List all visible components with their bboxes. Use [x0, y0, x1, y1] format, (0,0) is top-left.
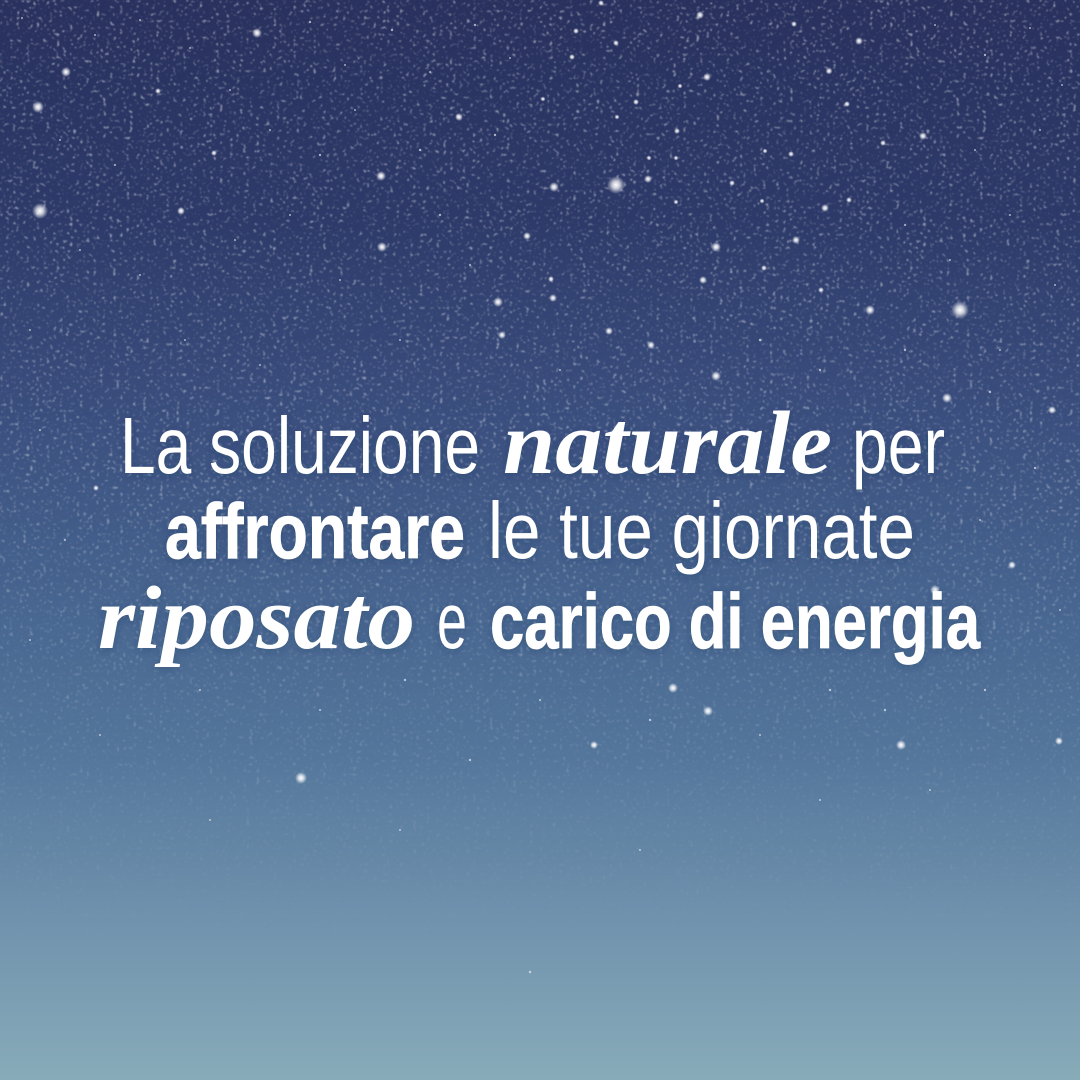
line 3: e [437, 576, 467, 665]
line 2: le tue giornate [488, 486, 915, 575]
line 1 [120, 394, 945, 493]
bright stars [32, 0, 1063, 784]
line 3: riposato [98, 569, 415, 668]
star dust texture [0, 0, 1080, 862]
line 1: La soluzione [120, 401, 480, 490]
line 3 [98, 569, 980, 668]
line 2: affrontare [165, 487, 465, 575]
slogan text [98, 394, 980, 668]
line 2 [165, 486, 915, 575]
line 1: naturale [503, 394, 832, 493]
line 1: per [852, 401, 945, 490]
